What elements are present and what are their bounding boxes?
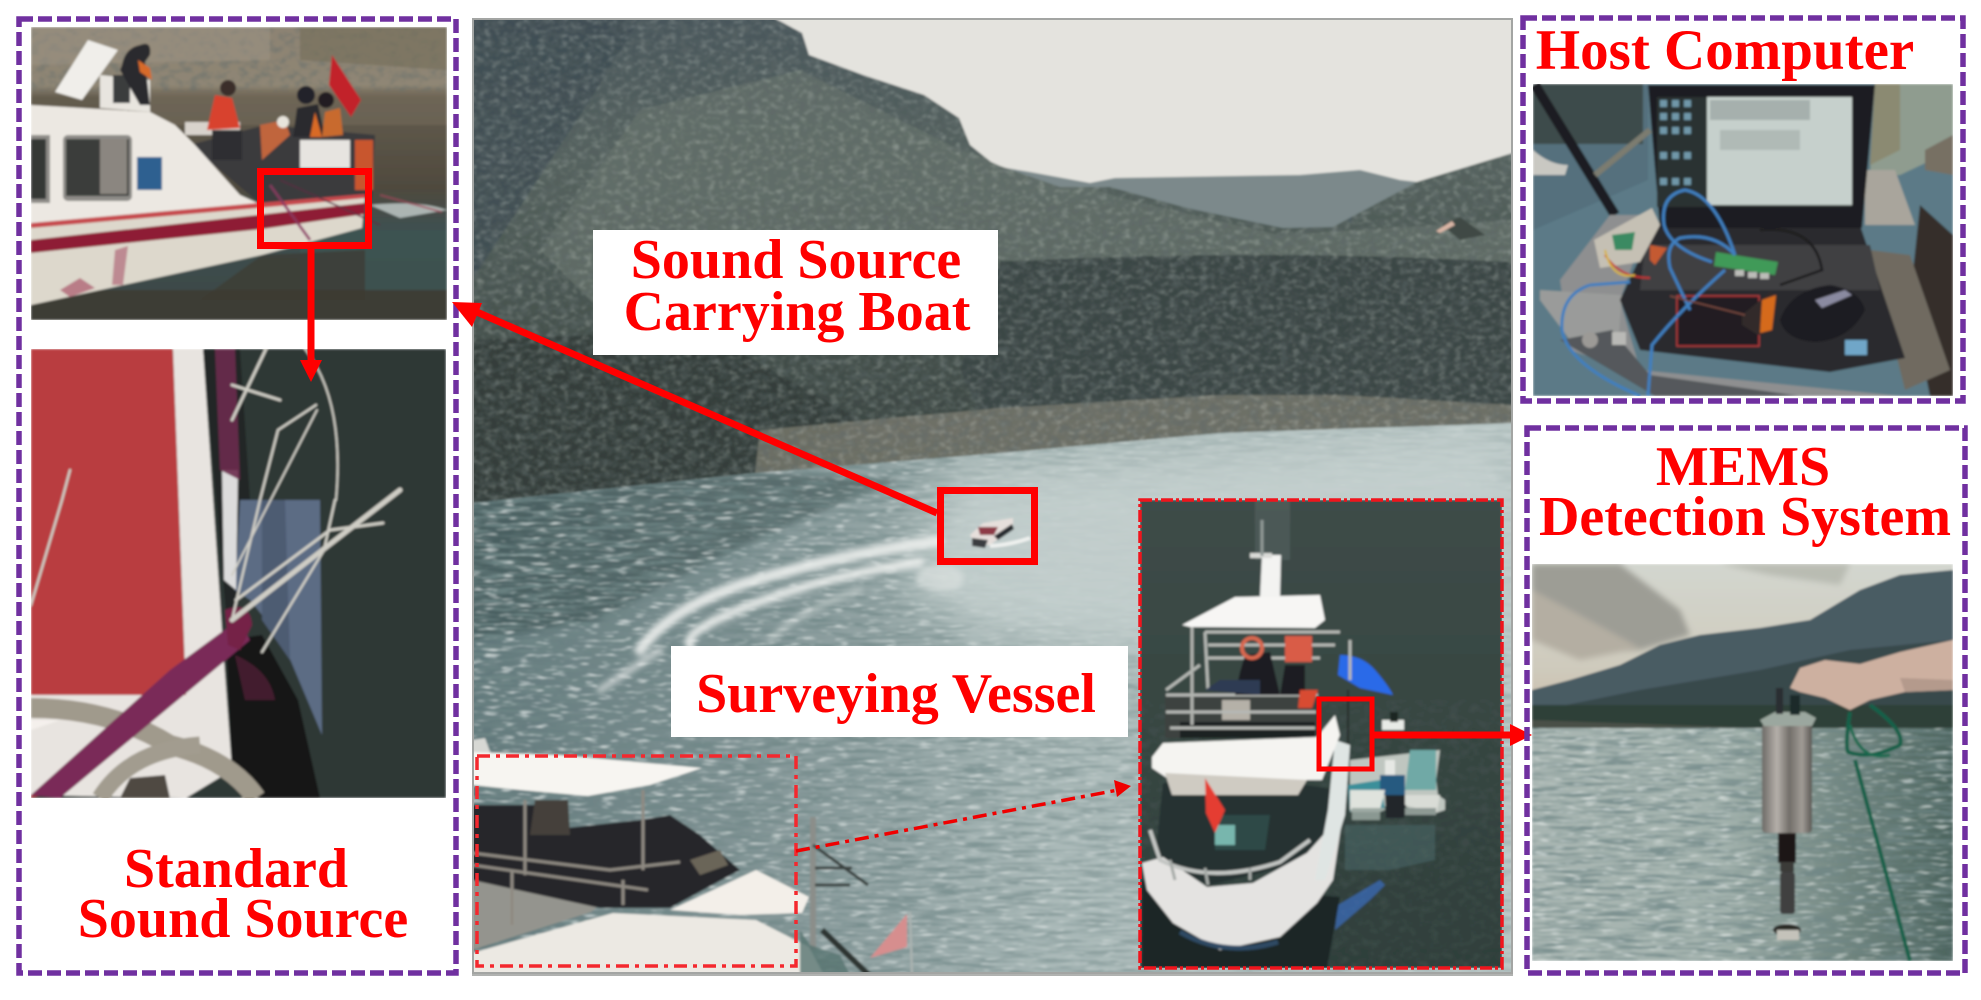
red highlight box on boat: [260, 172, 368, 246]
label: sound source carrying boat: Carrying Boat: [624, 281, 971, 343]
wake: [600, 541, 938, 690]
hazy upper left: [472, 18, 640, 280]
right hill: [1290, 153, 1513, 300]
red deck: [31, 349, 186, 697]
sky: [776, 20, 1511, 183]
label: MEMS detection system: MEMS: [1656, 436, 1830, 498]
panel: sound source boat and standard sound source: [19, 19, 456, 973]
umbrella: [1338, 655, 1393, 695]
water: [1532, 728, 1953, 961]
mountain: [472, 18, 1513, 508]
vessel hull: [1142, 813, 1343, 950]
white edge: [31, 349, 232, 798]
side boat: [1350, 750, 1445, 815]
hull shadow: [1142, 880, 1340, 968]
shoreline rocks: [755, 395, 1513, 473]
dark wedge: [204, 349, 250, 609]
red flag: [329, 55, 361, 117]
arrow: foreground boat to vessel photo: [796, 780, 1131, 851]
upper deck: [1165, 693, 1317, 738]
laptop base: [1620, 225, 1905, 372]
laptop case: [1560, 215, 1900, 396]
right side case: [1865, 170, 1915, 225]
panel: host computer: [1523, 18, 1963, 401]
red flag: [1205, 778, 1225, 833]
photo frame border: [473, 19, 1512, 973]
life buoy: [355, 140, 373, 190]
cable: [1847, 705, 1910, 961]
black zone: [226, 635, 320, 798]
photo: sound source carrying boat with crew: [31, 27, 447, 320]
grey ropes: [31, 708, 256, 798]
arrow: vessel to MEMS detection system: [1374, 724, 1532, 746]
dark lower left: [474, 334, 852, 454]
cabin windows: [1155, 783, 1340, 885]
dash-dot box on foreground boat: [477, 756, 796, 966]
mountain: [1532, 570, 1953, 740]
speedboat: [970, 518, 1030, 548]
boat deck dark area: [190, 125, 375, 205]
panel: MEMS detection system: [1527, 428, 1965, 973]
label: standard sound source: Standard: [124, 838, 348, 900]
foreground boat: [472, 738, 912, 978]
crew at upper deck: [1235, 652, 1280, 695]
label: MEMS detection system: [1539, 436, 1951, 548]
calmer area near far right: [900, 430, 1513, 650]
windows: [63, 135, 132, 201]
dark cliff band right: [966, 254, 1511, 372]
hull: [31, 197, 365, 305]
photo: MEMS hydrophone held over the water: [1532, 564, 1953, 961]
red highlight box on speedboat: [940, 490, 1034, 562]
blue usb cables: [1562, 190, 1735, 396]
water: [472, 420, 1513, 980]
reflections: [216, 250, 365, 291]
maroon strap: [31, 620, 250, 798]
green hub: [1714, 252, 1778, 275]
dashed frame: [19, 19, 456, 973]
life rings: [1242, 638, 1262, 658]
label: surveying vessel: [671, 646, 1128, 737]
label: sound source carrying boat: [593, 229, 998, 355]
reflections: [1345, 825, 1435, 870]
boat cabin: [31, 105, 262, 225]
label: MEMS detection system: Detection System: [1539, 486, 1951, 548]
arm and hand: [1790, 640, 1953, 710]
blue plate: [235, 500, 322, 735]
panel: surveying vessel photo: [1140, 500, 1502, 968]
crew: [120, 44, 150, 105]
dark sparkling band at left: [472, 473, 900, 640]
laptop lid: [1648, 85, 1875, 228]
label: host computer: Host Computer: [1536, 19, 1914, 82]
red highlight box on vessel: [1319, 699, 1372, 769]
label: standard sound source: Sound Source: [78, 888, 408, 950]
canopy: [1182, 595, 1325, 628]
label: surveying vessel: Surveying Vessel: [696, 663, 1096, 725]
arrow: speedboat to carrying boat photo: [452, 302, 937, 513]
label: sound source carrying boat: Sound Source: [631, 229, 961, 291]
sensor body: [1760, 688, 1816, 940]
vegetated lighter slope: [541, 70, 1511, 304]
panel: river scene photo: [472, 18, 1513, 980]
dashed frame: [1527, 428, 1965, 973]
cable ties: [31, 349, 400, 652]
acquisition board: [1594, 208, 1660, 268]
arrow: boat to sound source: [300, 249, 322, 382]
photo: laptop and acquisition hardware: [1533, 84, 1953, 396]
photo: standard sound source close up: [31, 349, 446, 798]
dashed border: [1140, 500, 1502, 968]
mouse and screwdriver: [1780, 285, 1865, 342]
dashed frame: [1523, 18, 1963, 401]
label: standard sound source: [78, 838, 408, 950]
distant ridge: [1006, 168, 1418, 230]
